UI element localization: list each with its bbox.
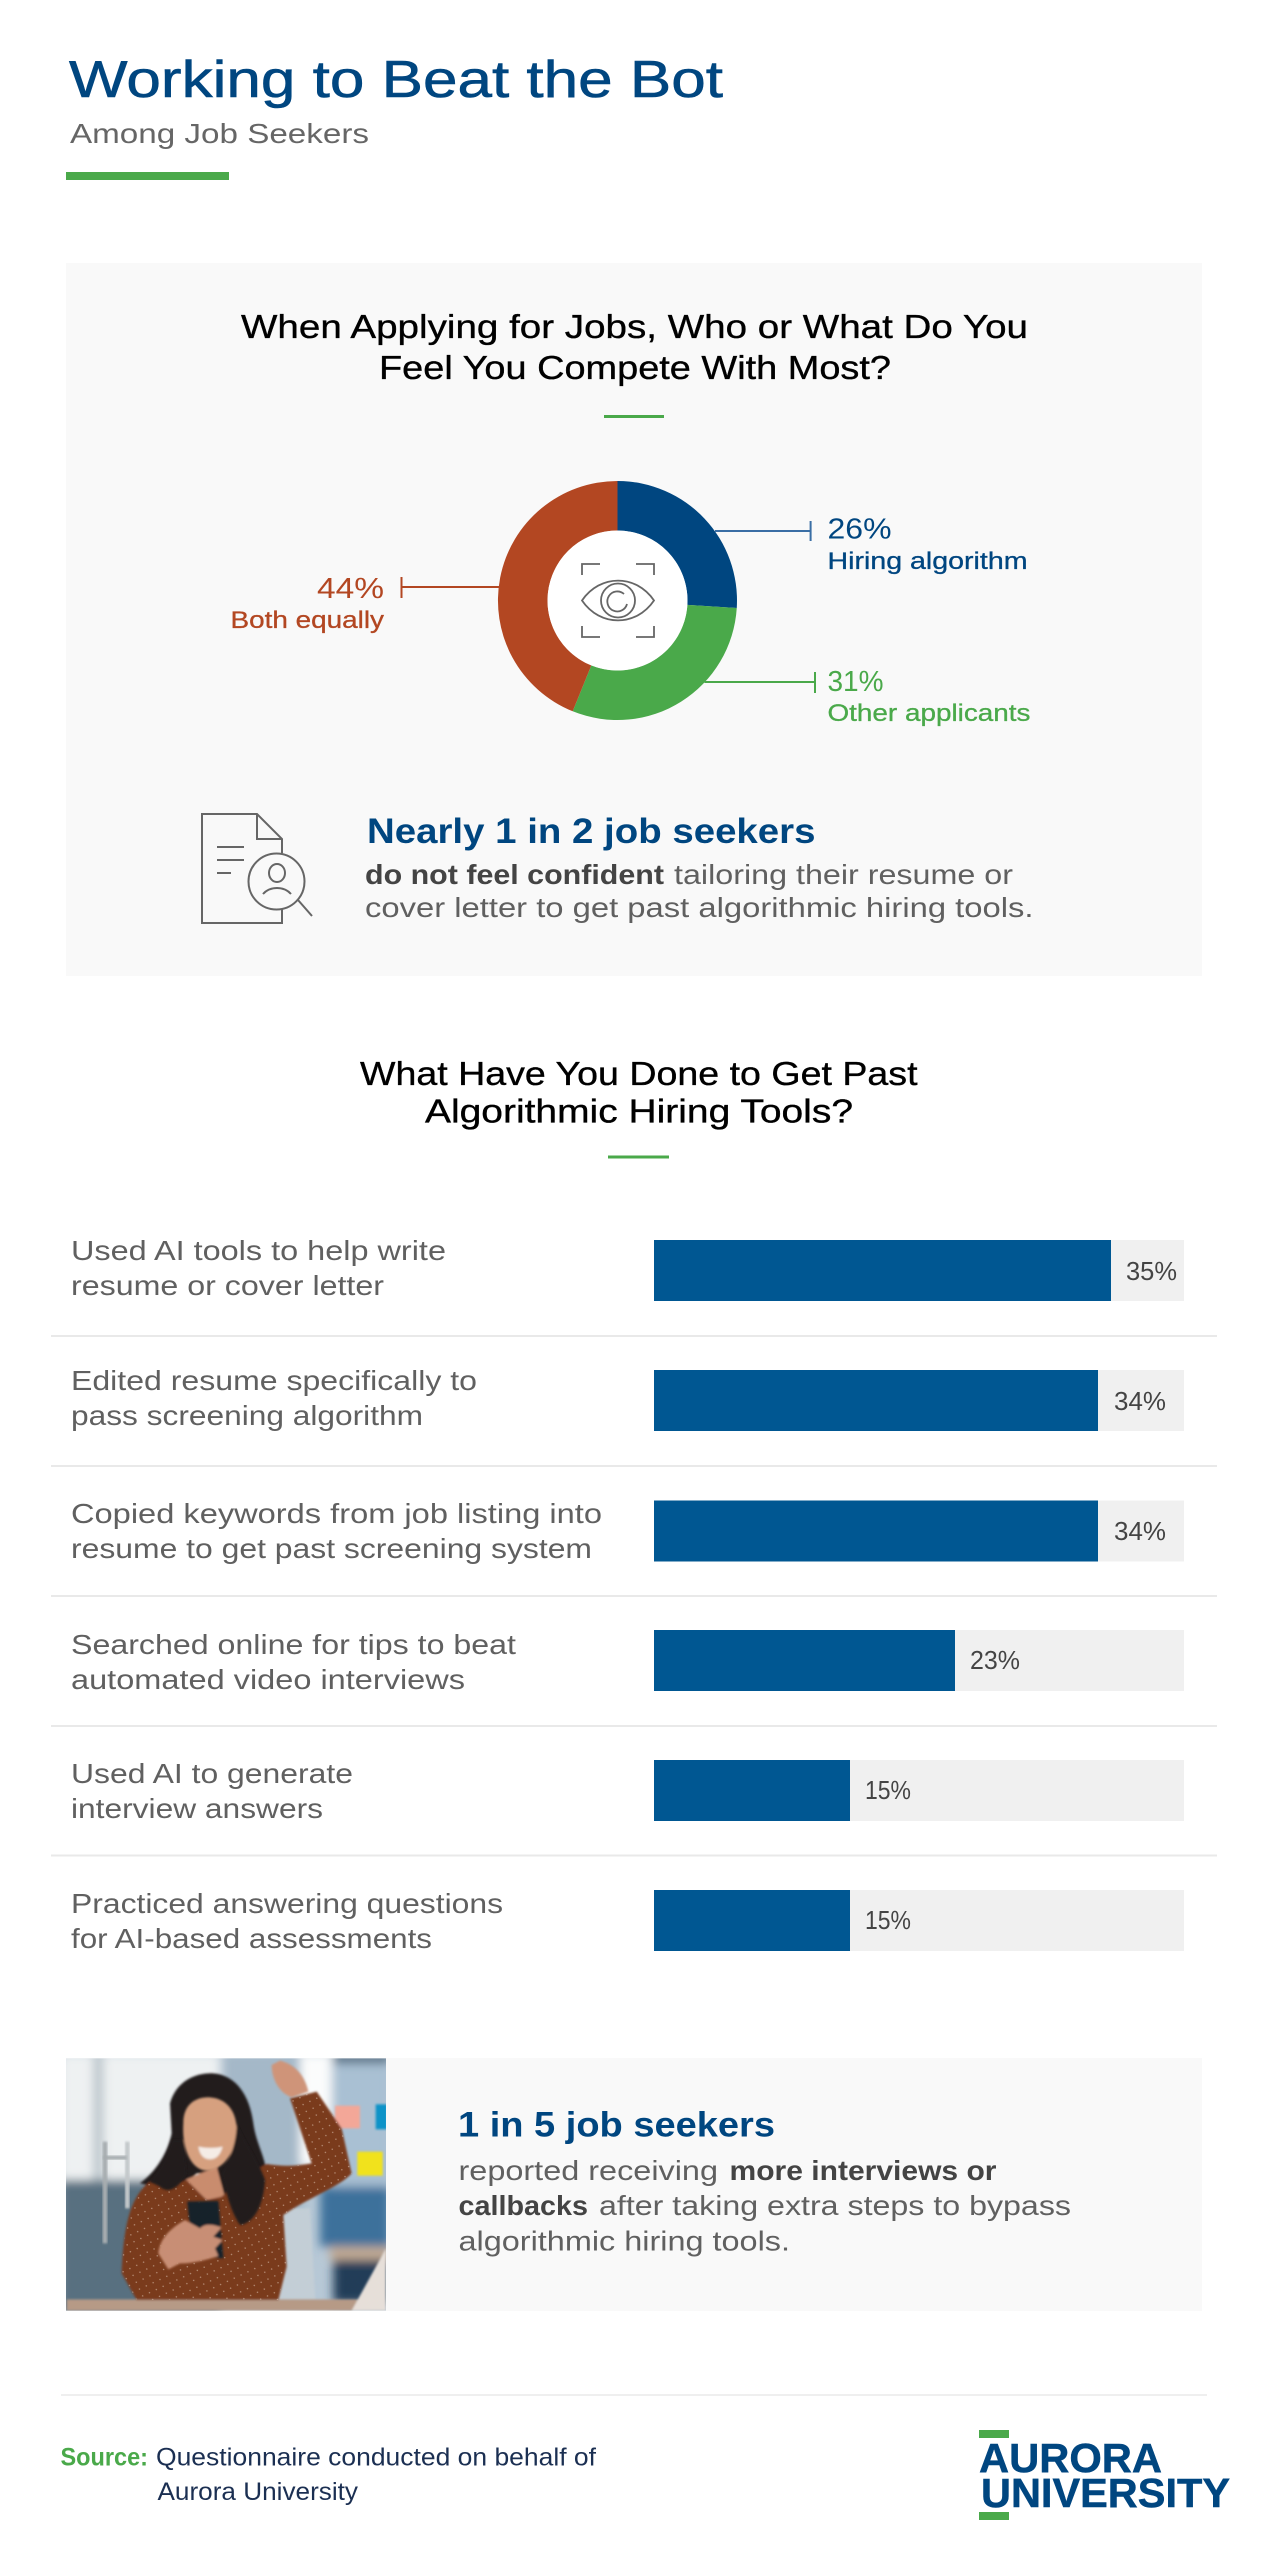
heading: compete question [241, 308, 1028, 386]
stat: 1 in 5 [458, 2106, 1071, 2256]
heading: compete question: When Applying for Jobs, Who or What Do You [241, 308, 1028, 345]
row: copied keywords 34%: resume to get past screening system [71, 1533, 592, 1564]
row: edited resume 34%: 34% [1114, 1386, 1166, 1416]
callout: other applicants 31%: 31% [828, 666, 884, 698]
row: copied keywords 34%: 34% [1114, 1516, 1166, 1546]
row: edited resume 34%: pass screening algorithm [71, 1400, 423, 1431]
icon: eye scan [582, 564, 654, 637]
photo: woman celebrating with phone [60, 2053, 390, 2313]
heading: compete question: Feel You Compete With Most? [379, 349, 891, 386]
row: searched online 23%: automated video interviews [71, 1664, 465, 1695]
source note: Aurora University [158, 2478, 359, 2506]
icon: resume under magnifier [202, 814, 312, 923]
stat: nearly 1 in 2: Nearly 1 in 2 job seekers [367, 812, 816, 851]
donut chart [498, 481, 737, 720]
stat: 1 in 5: more interviews or [730, 2155, 997, 2186]
panel: 1 in 5 job seekers [66, 2058, 1070, 2311]
row: used AI tools 35%: 35% [1126, 1256, 1177, 1286]
stat: 1 in 5: algorithmic hiring tools. [458, 2226, 790, 2256]
heading: what have you done: What Have You Done to Get Past [360, 1055, 918, 1092]
stat: 1 in 5: reported receiving [458, 2155, 718, 2186]
callout: hiring algorithm 26%: 26% [828, 514, 892, 546]
row: practiced answering 15%: for AI-based assessments [71, 1923, 432, 1954]
stat: 1 in 5: after taking extra steps to bypass [599, 2190, 1071, 2221]
panel: who you compete with [66, 263, 1202, 976]
row: used AI tools 35%: Used AI tools to help write [71, 1235, 446, 1266]
row: edited resume 34%: Edited resume specifically to [71, 1365, 477, 1396]
row: AI interview answers 15%: Used AI to generate [71, 1758, 353, 1789]
row: searched online 23%: 23% [970, 1645, 1020, 1675]
row: searched online 23% [71, 1629, 1184, 1695]
callout: hiring algorithm 26%: Hiring algorithm [828, 548, 1028, 575]
row: used AI tools 35%: resume or cover letter [71, 1270, 384, 1301]
callout: other applicants 31% [704, 666, 1030, 727]
callout: both equally 44%: 44% [317, 573, 384, 605]
row: practiced answering 15% [71, 1888, 1184, 1954]
row: AI interview answers 15% [71, 1758, 1184, 1824]
bar chart: actions taken [51, 1235, 1217, 1954]
row: practiced answering 15%: Practiced answering questions [71, 1888, 503, 1919]
stat: nearly 1 in 2: cover letter to get past algorithmic hiring tools. [365, 892, 1034, 923]
row: edited resume 34% [71, 1365, 1184, 1431]
title accent bar [66, 172, 229, 180]
source note [60, 2444, 596, 2506]
row: practiced answering 15%: 15% [865, 1905, 911, 1935]
callout: both equally 44% [230, 573, 500, 634]
subtitle: Among Job Seekers [70, 118, 369, 149]
logo: Aurora University [979, 2430, 1230, 2520]
callout: hiring algorithm 26% [715, 514, 1028, 575]
source note: Questionnaire conducted on behalf of [156, 2444, 596, 2472]
title: Working to Beat the Bot [69, 51, 724, 109]
heading: what have you done [360, 1055, 918, 1130]
logo: Aurora University: AURORA [979, 2435, 1162, 2481]
row: copied keywords 34%: Copied keywords from job listing into [71, 1498, 602, 1529]
row: used AI tools 35% [71, 1235, 1184, 1301]
stat: nearly 1 in 2 [365, 812, 1034, 923]
row: AI interview answers 15%: interview answers [71, 1793, 323, 1824]
stat: 1 in 5: 1 in 5 job seekers [458, 2106, 775, 2144]
heading: what have you done: Algorithmic Hiring Tools? [425, 1092, 853, 1130]
callout: other applicants 31%: Other applicants [828, 700, 1030, 727]
source note: Source: [60, 2444, 148, 2472]
stat: nearly 1 in 2: do not feel confident [365, 859, 664, 890]
row: copied keywords 34% [71, 1498, 1184, 1564]
logo: Aurora University: UNIVERSITY [981, 2470, 1230, 2516]
row: searched online 23%: Searched online for tips to beat [71, 1629, 516, 1660]
stat: 1 in 5: callbacks [458, 2190, 588, 2221]
callout: both equally 44%: Both equally [230, 607, 384, 634]
stat: nearly 1 in 2: tailoring their resume or [674, 859, 1013, 890]
row: AI interview answers 15%: 15% [865, 1775, 911, 1805]
